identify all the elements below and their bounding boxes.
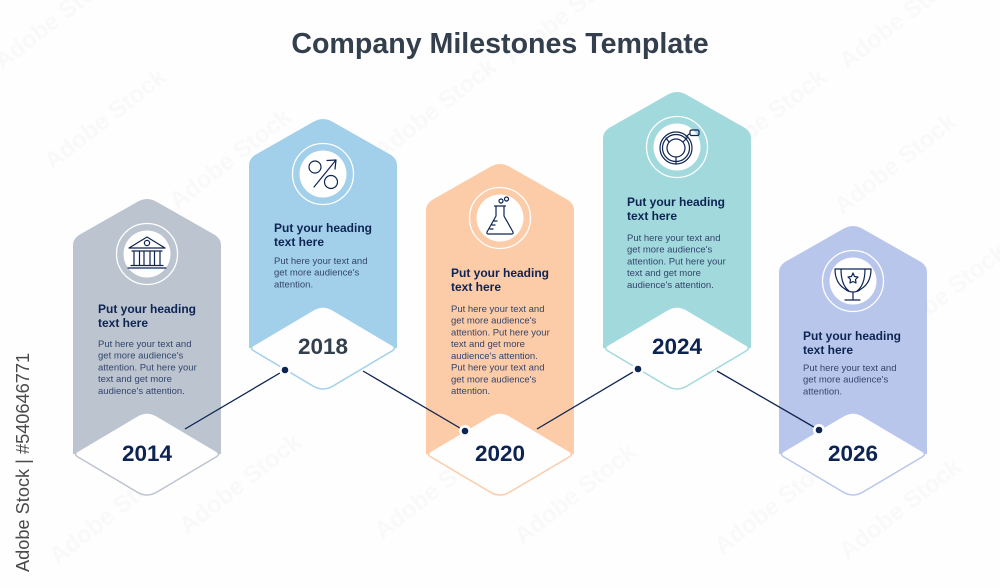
text: Adobe Stock xyxy=(174,428,307,540)
card body 2018 xyxy=(249,119,397,348)
year diamond 2024 xyxy=(606,307,748,389)
text 2020: attention. Put here your xyxy=(451,328,550,338)
panel: milestone 2026 xyxy=(779,226,927,495)
text 2020: get more audience's xyxy=(451,316,537,327)
panel: milestone 2024 xyxy=(603,92,751,389)
text 2014: Put here your text and xyxy=(98,339,191,350)
card body 2024 xyxy=(603,92,751,348)
side credit text: Adobe Stock | #540646771 xyxy=(13,353,33,572)
heading 2024: Put your heading xyxy=(627,195,725,209)
heading 2020: text here xyxy=(451,280,501,294)
panel: milestone 2018 xyxy=(249,119,397,389)
text 2018: get more audience's xyxy=(274,268,360,279)
year diamond 2026 xyxy=(782,413,924,495)
year 2018: 2018 xyxy=(298,334,348,359)
heading 2026: text here xyxy=(803,343,853,357)
heading 2018: Put your heading xyxy=(274,221,372,235)
connector: 2014 to 2018 xyxy=(185,364,291,429)
card body 2020 xyxy=(426,164,574,454)
connector: 2020 to 2024 xyxy=(537,363,644,429)
year 2014: 2014 xyxy=(122,441,173,466)
connector: 2018 to 2020 xyxy=(363,371,471,437)
card body 2026 xyxy=(779,226,927,454)
text: Adobe Stock xyxy=(44,458,177,570)
year 2024: 2024 xyxy=(652,334,703,359)
icon: trophy xyxy=(822,250,884,312)
text: Adobe Stock xyxy=(834,453,967,565)
heading 2026: Put your heading xyxy=(803,329,901,343)
text 2020: text and get more xyxy=(451,339,525,350)
text 2020: Put here your text and xyxy=(451,304,544,315)
heading 2018: text here xyxy=(274,235,324,249)
heading 2024: text here xyxy=(627,209,677,223)
year 2026: 2026 xyxy=(828,441,878,466)
heading 2014: text here xyxy=(98,316,148,330)
year diamond 2018 xyxy=(252,307,394,389)
text 2020: Put here your text and xyxy=(451,363,544,374)
year diamond 2014 xyxy=(76,413,218,495)
text 2018: attention. xyxy=(274,280,313,290)
panel: milestone 2020 xyxy=(426,164,574,495)
icon: bank xyxy=(116,224,178,284)
connector: 2024 to 2026 xyxy=(717,371,825,436)
text: Adobe Stock xyxy=(829,108,962,220)
heading 2014: Put your heading xyxy=(98,302,196,316)
card body 2014 xyxy=(73,199,221,454)
heading 2020: Put your heading xyxy=(451,266,549,280)
text 2024: Put here your text and xyxy=(627,233,720,244)
text: Adobe Stock xyxy=(39,63,172,175)
icon: flask xyxy=(470,188,530,248)
text 2020: get more audience's xyxy=(451,374,537,386)
text: Adobe Stock xyxy=(699,63,832,175)
icon: donut chart xyxy=(646,116,708,178)
text 2020: attention. xyxy=(451,386,490,397)
panel: milestone 2014 xyxy=(73,199,221,495)
text: Adobe Stock xyxy=(709,448,842,560)
text 2014: text and get more xyxy=(98,374,172,385)
text: Adobe Stock xyxy=(509,438,642,550)
text 2024: audience's attention. xyxy=(627,280,714,291)
text 2024: text and get more xyxy=(627,268,701,279)
year diamond 2020 xyxy=(428,413,572,495)
text 2026: get more audience's xyxy=(803,375,889,386)
icon: percent arrow xyxy=(292,144,354,204)
text 2024: attention. Put here your xyxy=(627,256,726,268)
text 2014: audience's attention. xyxy=(98,386,185,397)
text 2020: audience's attention. xyxy=(451,351,538,362)
text: Adobe Stock xyxy=(164,103,297,215)
text 2026: Put here your text and xyxy=(803,363,896,374)
text: Adobe Stock xyxy=(369,53,502,165)
text: Adobe Stock xyxy=(369,433,502,545)
text 2024: get more audience's xyxy=(627,245,713,256)
text 2026: attention. xyxy=(803,386,842,398)
text 2014: attention. Put here your xyxy=(98,362,197,374)
text 2018: Put here your text and xyxy=(274,256,367,267)
text 2014: get more audience's xyxy=(98,351,184,362)
title: Company Milestones Template xyxy=(291,28,709,60)
year 2020: 2020 xyxy=(475,441,525,466)
